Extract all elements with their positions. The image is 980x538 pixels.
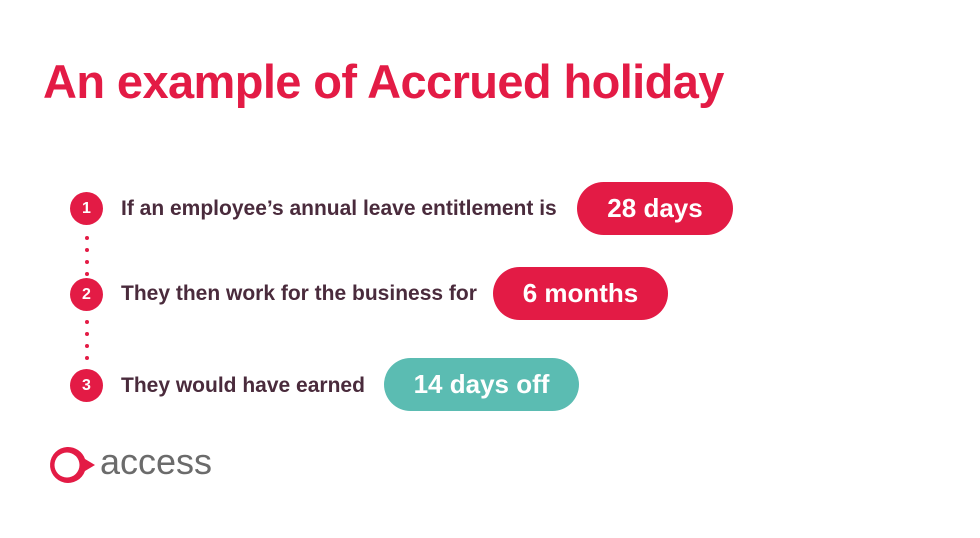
- number 1: [70, 192, 103, 225]
- pill: 14 days off: 14 days off: [414, 369, 549, 399]
- number 1: 1: [82, 200, 91, 217]
- logo text: access: [100, 441, 212, 482]
- icon: logo ring: [50, 447, 95, 483]
- step 1: [70, 182, 733, 235]
- text 1: If an employee’s annual leave entitlement is: [121, 197, 557, 220]
- number 2: [70, 278, 103, 311]
- text 3: They would have earned: [121, 374, 365, 397]
- number 3: 3: [82, 377, 91, 394]
- step 2: [70, 267, 668, 320]
- pill: 6 months: [493, 267, 668, 320]
- number 3: [70, 369, 103, 402]
- text 2: They then work for the business for: [121, 282, 477, 305]
- logo: [50, 441, 212, 483]
- pill: 28 days: [577, 182, 733, 235]
- connector dots: [85, 236, 89, 360]
- pill: 6 months: 6 months: [523, 278, 638, 308]
- number 2: 2: [82, 286, 91, 303]
- step 3: [70, 358, 579, 411]
- pill: 28 days: 28 days: [607, 193, 703, 223]
- pill: 14 days off: [384, 358, 579, 411]
- title: An example of Accrued holiday: [43, 55, 724, 108]
